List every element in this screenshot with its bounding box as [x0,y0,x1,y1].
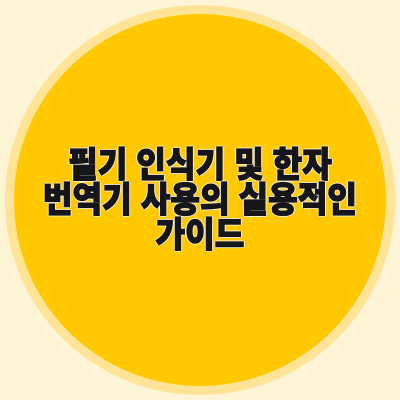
title: 번역기 사용의 실용적인 [43,181,357,220]
title [43,146,357,255]
title: 필기 인식기 및 한자 [68,146,332,185]
title: 가이드 [156,216,244,255]
